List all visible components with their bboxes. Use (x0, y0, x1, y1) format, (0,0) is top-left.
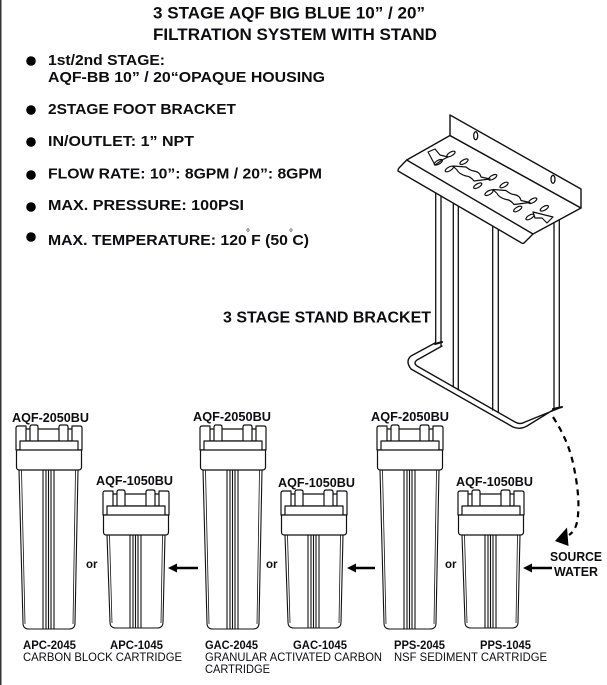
housing column 2: granular activated carbon (193, 409, 355, 629)
bullet: stage housing: AQF-BB 10” / 20“OPAQUE HOUSING (48, 69, 325, 86)
cartridge caption: granular activated carbon: GRANULAR ACTIVATED CARBON (205, 652, 382, 664)
bullet: in/outlet: IN/OUTLET: 1” NPT (48, 133, 194, 150)
specification list (26, 52, 325, 249)
or label: or (266, 559, 278, 571)
arrow: source water inlet (523, 564, 552, 572)
housing label: AQF-1050BU (278, 475, 355, 490)
mounting slots (428, 149, 553, 223)
page left edge line (0, 0, 2, 685)
housing label: AQF-2050BU (12, 410, 89, 425)
cartridge caption: granular activated carbon: CARTRIDGE (205, 664, 270, 676)
bullet: flow rate: FLOW RATE: 10”: 8GPM / 20”: 8GPM (48, 166, 322, 182)
housing column 3: sediment (371, 409, 533, 629)
cartridge caption: carbon block: APC-1045 (110, 640, 164, 652)
cartridge caption: carbon block: APC-2045 (23, 640, 77, 652)
bracket foot rail (408, 343, 562, 428)
bracket columns (436, 190, 559, 412)
bullet: stage housing: 1st/2nd STAGE: (48, 52, 165, 69)
source water label (550, 550, 602, 579)
cartridge caption: carbon block (23, 640, 182, 664)
cartridge caption: granular activated carbon (205, 640, 382, 676)
title: 3 STAGE AQF BIG BLUE 10” / 20” (153, 4, 425, 22)
source water label: SOURCE (550, 550, 602, 564)
bullet: foot bracket: 2STAGE FOOT BRACKET (48, 101, 236, 118)
arrow: between stage 3 and stage 2 (347, 564, 375, 572)
bracket top plate (398, 136, 581, 243)
cartridge caption: sediment (394, 640, 547, 664)
20 inch housing (200, 425, 266, 629)
cartridge caption: sediment: PPS-1045 (480, 640, 532, 652)
stand bracket drawing (398, 115, 581, 428)
title (153, 4, 437, 44)
cartridge caption: granular activated carbon: GAC-1045 (293, 640, 348, 652)
housing column 1: carbon block (12, 410, 173, 629)
20 inch housing (377, 425, 443, 629)
20 inch housing (16, 425, 82, 629)
housing label: AQF-2050BU (371, 409, 449, 424)
mounting holes (474, 132, 478, 140)
cartridge caption: granular activated carbon: GAC-2045 (205, 640, 259, 652)
housing label: AQF-1050BU (96, 473, 173, 488)
10 inch housing (281, 490, 347, 628)
cartridge caption: carbon block: CARBON BLOCK CARTRIDGE (23, 652, 182, 664)
stand bracket label: 3 STAGE STAND BRACKET (223, 310, 432, 326)
10 inch housing (103, 490, 169, 628)
arrow: dashed water path from bracket to source water (553, 417, 578, 546)
bullet: max temperature: ° (246, 228, 250, 239)
housing label: AQF-1050BU (456, 474, 533, 489)
cartridge caption: sediment: PPS-2045 (394, 640, 446, 652)
source water label: WATER (554, 565, 598, 579)
or label: or (86, 559, 98, 571)
bracket back flange (450, 115, 581, 208)
housing label: AQF-2050BU (193, 409, 271, 424)
bullet: max temperature: ° (289, 228, 293, 239)
or label: or (445, 559, 457, 571)
arrow: between stage 2 and stage 1 (168, 564, 198, 572)
10 inch housing (458, 490, 524, 628)
title: FILTRATION SYSTEM WITH STAND (153, 26, 437, 44)
bullet: stage housing (26, 52, 325, 86)
cartridge caption: sediment: NSF SEDIMENT CARTRIDGE (394, 652, 547, 664)
bullet: max pressure: MAX. PRESSURE: 100PSI (48, 197, 244, 214)
bullet: max temperature: MAX. TEMPERATURE: 120 F (50 C) (48, 232, 309, 249)
